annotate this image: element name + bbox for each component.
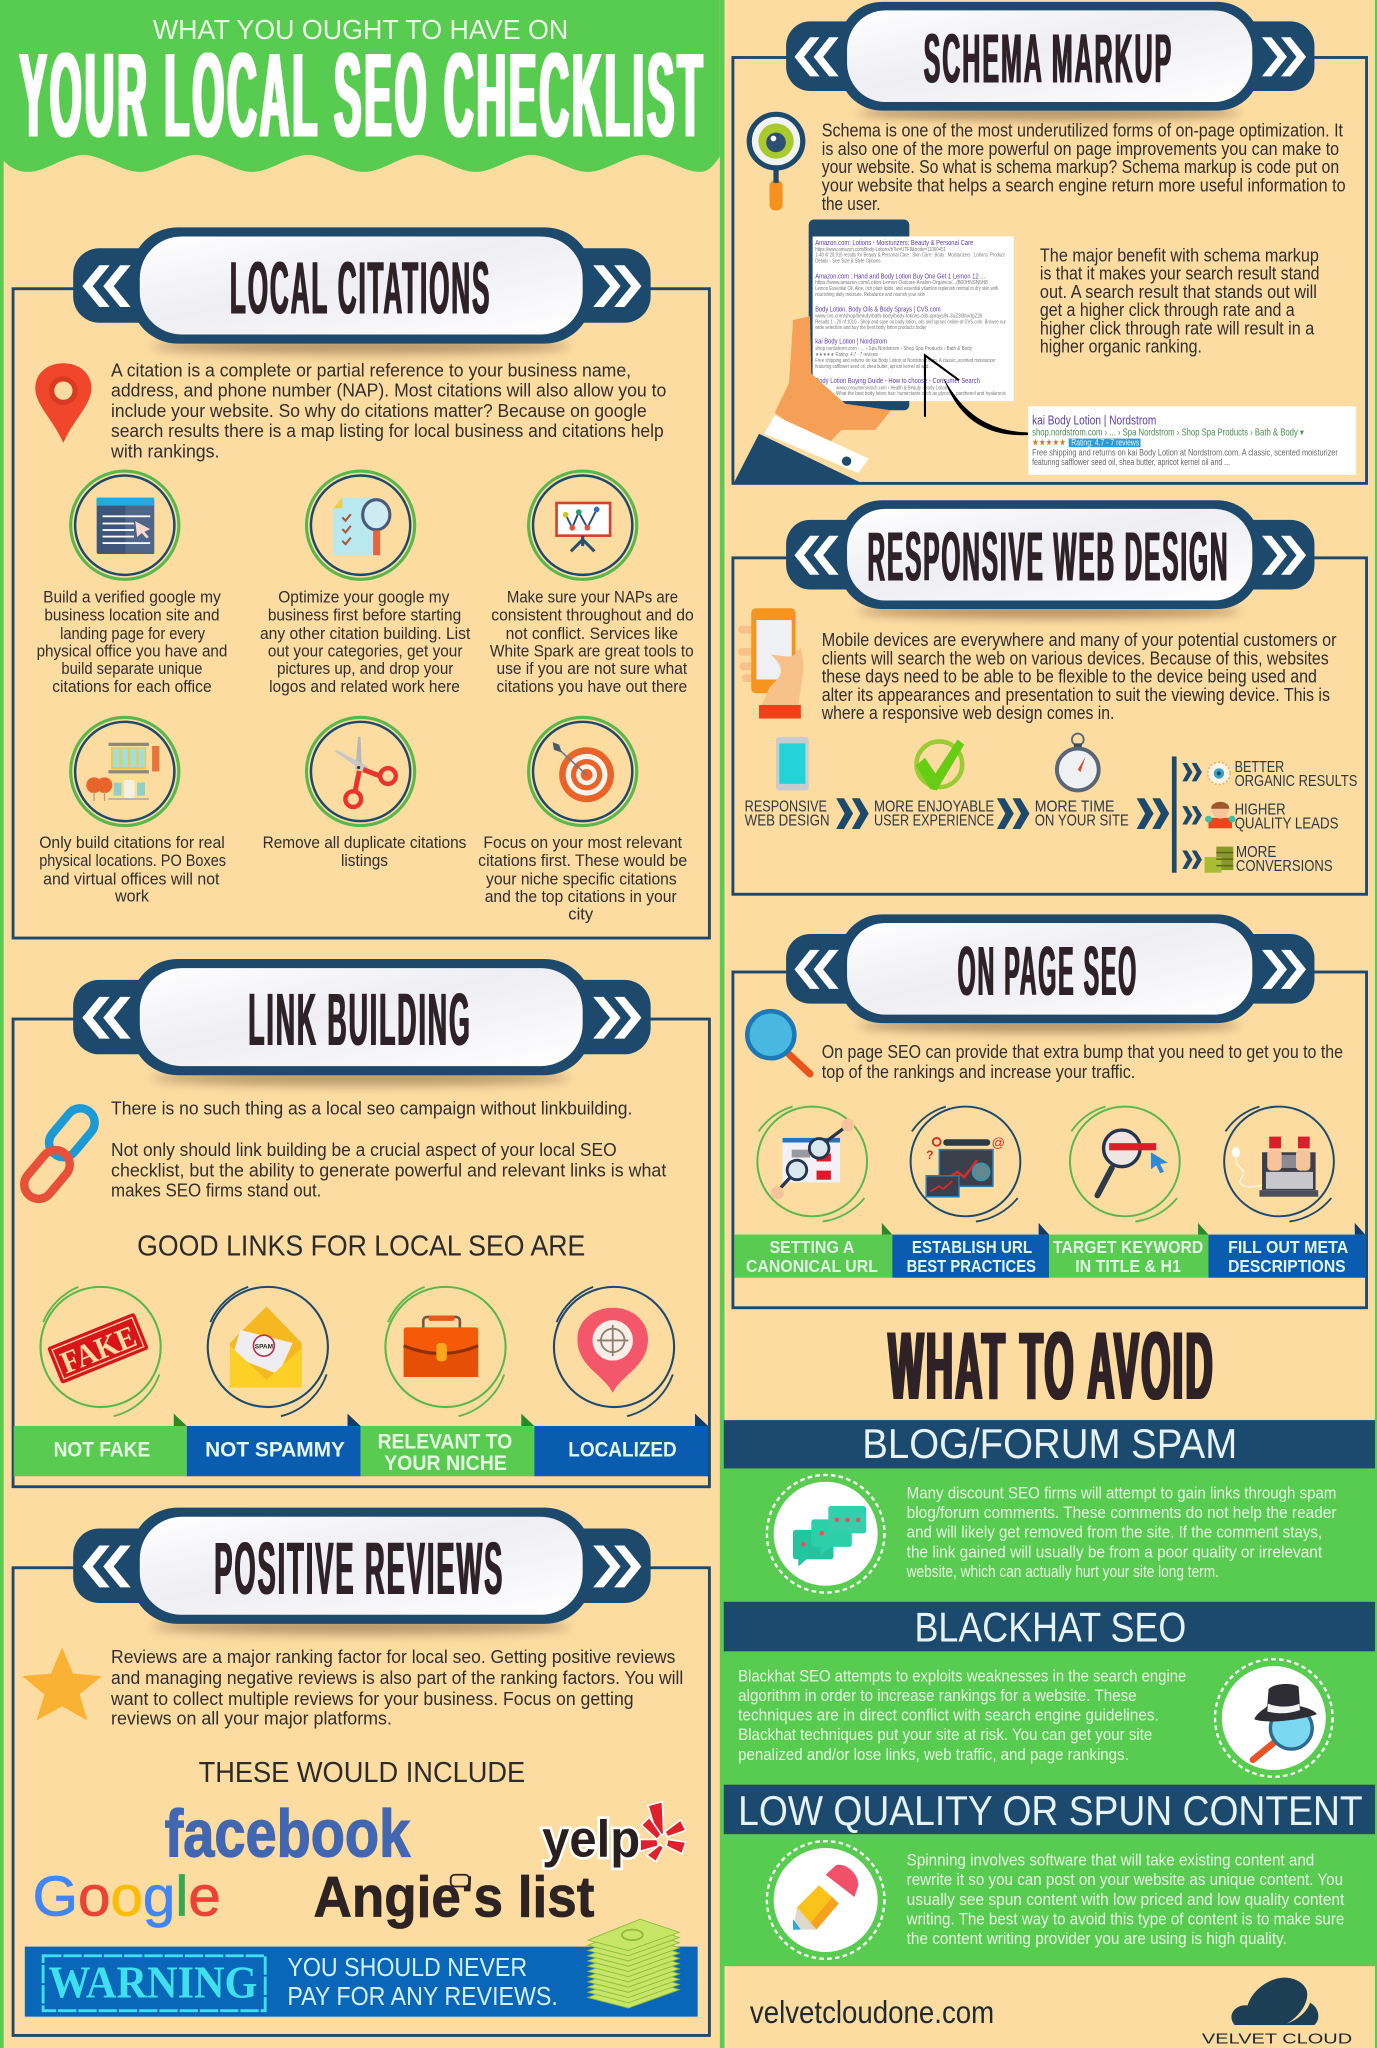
caption: optimize: logos and related work here xyxy=(269,678,460,696)
intro text xyxy=(110,359,666,461)
heading: positive reviews xyxy=(73,1508,651,1634)
icon: pencil eraser xyxy=(767,1841,884,1959)
search results screenshot xyxy=(813,236,1014,401)
panel: responsive web design xyxy=(733,500,1367,894)
panel: link building xyxy=(13,959,709,1487)
caption: consistent naps: White Spark are great tools to xyxy=(490,642,694,660)
caption: consistent naps: use if you are not sure what xyxy=(496,660,688,678)
ribbon: establish url best practices: ESTABLISH URL xyxy=(912,1237,1032,1257)
search results screenshot: Details - See Size & Style Options xyxy=(815,259,881,265)
icon: typewriter laptop xyxy=(1224,1107,1334,1222)
intro text: reviews on all your major platforms. xyxy=(111,1708,392,1729)
ribbon: establish url best practices: BEST PRACTICES xyxy=(907,1256,1036,1276)
body text xyxy=(906,1485,1337,1581)
body text: Blackhat SEO attempts to exploits weaknesses in the search engine xyxy=(738,1667,1186,1685)
caption: duplicates xyxy=(263,834,466,870)
body text: and will likely get removed from the site. If the comment stays, xyxy=(907,1524,1322,1542)
section: blog forum spam xyxy=(724,1420,1375,1602)
search results screenshot: 1-48 of 20,915 results for Beauty & Personal Care : Skin Care : Body : Moisturizers : Lotions. Product xyxy=(815,253,1005,259)
subheading: good links: GOOD LINKS FOR LOCAL SEO ARE xyxy=(137,1231,585,1263)
benefit text: get a higher click through rate and a xyxy=(1040,299,1295,320)
caption: consistent naps: not conflict. Services like xyxy=(506,625,678,643)
benefit text xyxy=(1040,244,1320,357)
logo: facebook: facebook xyxy=(165,1797,411,1871)
icon: spam envelope xyxy=(208,1287,328,1416)
flow step: more enjoyable user experience: MORE ENJOYABLE xyxy=(874,798,994,815)
heading: positive reviews: POSITIVE REVIEWS xyxy=(214,1527,504,1610)
flow step: responsive web design xyxy=(745,737,830,830)
benefit text: out. A search result that stands out will xyxy=(1040,281,1317,302)
icon: url best practices: @ xyxy=(992,1135,1005,1150)
panel: on page seo xyxy=(733,914,1367,1308)
caption: duplicates: Remove all duplicate citations xyxy=(263,834,466,852)
caption: consistent naps: Make sure your NAPs are xyxy=(507,588,678,606)
callout: search result: kai Body Lotion | Nordstrom xyxy=(1032,413,1156,428)
footer xyxy=(750,1978,1352,2047)
callout: search result: Rating: 4.7 - 7 reviews xyxy=(1071,438,1140,448)
ribbon: target keyword in title and h1: TARGET KEYWORD xyxy=(1053,1237,1203,1257)
search results screenshot: Amazon.com : Hand and Body Lotion Buy One Get 1 Lemon 12 ... xyxy=(815,271,985,280)
flow step: more time on your site: MORE TIME xyxy=(1035,798,1114,815)
panel: local citations xyxy=(13,227,709,938)
ribbon: relevant to your niche xyxy=(361,1414,534,1476)
icon: money stack xyxy=(588,1919,679,2008)
icon: presentation board xyxy=(529,471,637,579)
result: more conversions: CONVERSIONS xyxy=(1236,858,1333,875)
caption: relevant citations: and the top citations in your xyxy=(485,888,677,906)
caption: optimize: business first before starting xyxy=(268,607,461,625)
icon: magnifier xyxy=(747,1011,810,1074)
search results screenshot: featuring safflower seed oil, shea butter, apricot kernel oil and ... xyxy=(815,364,933,370)
search results screenshot: kai Body Lotion | Nordstrom xyxy=(815,337,887,346)
icon: black hat and magnifier xyxy=(1215,1659,1333,1777)
panel: schema markup xyxy=(733,2,1367,483)
body text: Many discount SEO firms will attempt to gain links through spam xyxy=(907,1485,1337,1503)
icon: hand holding phone xyxy=(738,608,803,719)
benefit text: The major benefit with schema markup xyxy=(1040,244,1319,265)
body text xyxy=(906,1852,1345,1948)
caption: duplicates: listings xyxy=(341,852,388,870)
caption: relevant citations: citations first. These would be xyxy=(478,852,687,870)
icon: browser xyxy=(71,471,179,579)
caption: relevant citations xyxy=(478,834,687,924)
panel: positive reviews xyxy=(13,1508,709,2035)
flow step: responsive web design: RESPONSIVE xyxy=(745,798,827,815)
heading: responsive web design xyxy=(786,500,1314,619)
ribbon: fill out meta descriptions: DESCRIPTIONS xyxy=(1228,1256,1346,1276)
icon: shop xyxy=(71,717,179,826)
intro text: checklist, but the ability to generate powerful and relevant links is what xyxy=(111,1159,666,1180)
ribbon: localized xyxy=(534,1414,708,1476)
caption: build google site: citations for each office xyxy=(52,678,212,696)
logo: velvet cloud xyxy=(1202,1978,1352,2047)
flow step: more time on your site: ON YOUR SITE xyxy=(1035,813,1129,830)
arrow xyxy=(1137,798,1169,829)
callout: search result: shop.nordstrom.com › ... › Spa Nordstrom › Shop Spa Products › Bath & Body ▾ xyxy=(1032,428,1304,439)
search results screenshot: Body Lotion Buying Guide - How to choose - Consumer Search xyxy=(815,376,980,385)
search results screenshot: Lemon Essential Oil, Aloe, rich plant lipids, and essential vitamins replenish normal to dry skin with xyxy=(815,286,998,292)
benefit text: is that it makes your search result stand xyxy=(1040,263,1320,284)
warning message: PAY FOR ANY REVIEWS. xyxy=(287,1981,558,2011)
ribbon: not fake: NOT FAKE xyxy=(54,1437,150,1462)
divider bar xyxy=(1172,756,1177,873)
search results screenshot: www.cvs.com/shop/beauty/bath-body/body-lotions-oils-sprays/N-3uZ3l3bxdgZ2k xyxy=(815,313,983,319)
icon: chat bubbles xyxy=(767,1475,884,1593)
search results screenshot: Free shipping and returns on kai Body Lotion at Nordstrom.com. A classic, scented moisturizer xyxy=(815,358,996,364)
icon: star xyxy=(22,1647,102,1721)
ribbon: target keyword in title and h1 xyxy=(1049,1223,1208,1278)
icon: magnifier with eye xyxy=(749,114,803,210)
flow step: more enjoyable user experience xyxy=(874,739,994,830)
body text: rewrite it so you can post on your website as unique content. You xyxy=(907,1871,1343,1889)
section: blackhat seo xyxy=(724,1602,1375,1785)
caption: optimize: any other citation building. List xyxy=(260,625,471,643)
caption: consistent naps: citations you have out there xyxy=(496,678,687,696)
callout: search result: ★★★★★ xyxy=(1032,438,1066,449)
caption: relevant citations: your niche specific citations xyxy=(486,870,677,888)
ribbon: relevant to your niche: YOUR NICHE xyxy=(384,1450,507,1475)
warning bar xyxy=(25,1919,698,2017)
intro text: search results there is a map listing for local business and citations help xyxy=(111,420,664,441)
result: better organic results: ORGANIC RESULTS xyxy=(1235,773,1357,790)
ribbon: setting a canonical url: SETTING A xyxy=(769,1237,855,1257)
intro text: and managing negative reviews is also part of the ranking factors. You will xyxy=(111,1667,683,1688)
subheading: these would include: THESE WOULD INCLUDE xyxy=(199,1757,525,1789)
intro text: where a responsive web design comes in. xyxy=(821,702,1114,723)
section title bar xyxy=(724,1420,1375,1468)
intro text: with rankings. xyxy=(110,440,219,461)
intro text xyxy=(821,629,1336,723)
icon: target xyxy=(529,717,637,826)
heading: local citations xyxy=(73,227,651,354)
logo: velvet cloud: VELVET CLOUD xyxy=(1202,2030,1352,2047)
body text: blog/forum comments. These comments do not help the reader xyxy=(907,1504,1337,1522)
body text: writing. The best way to avoid this type of content is to make sure xyxy=(906,1910,1344,1928)
illustration: hand holding phone with search results xyxy=(734,219,1028,482)
result: more conversions: MORE xyxy=(1236,844,1276,861)
body text xyxy=(738,1667,1186,1764)
caption: real locations: Only build citations for real xyxy=(39,834,225,852)
search results screenshot: www.consumersearch.com › Health & Beauty › Body Lotion xyxy=(836,385,947,391)
footer url: velvetcloudone.com xyxy=(750,1995,994,2030)
intro text xyxy=(111,1097,666,1201)
callout: search result xyxy=(1028,406,1356,475)
search results screenshot: Amazon.com: Lotions - Moisturizers: Beauty & Personal Care xyxy=(815,238,973,247)
benefit text: higher organic ranking. xyxy=(1040,336,1202,357)
icon: scissors xyxy=(306,717,415,826)
intro text: There is no such thing as a local seo campaign without linkbuilding. xyxy=(111,1097,632,1118)
intro text: Reviews are a major ranking factor for local seo. Getting positive reviews xyxy=(111,1646,675,1667)
ribbon: setting a canonical url: CANONICAL URL xyxy=(746,1256,878,1276)
heading: local citations: LOCAL CITATIONS xyxy=(230,247,491,330)
intro text: Not only should link building be a crucial aspect of your local SEO xyxy=(111,1139,617,1160)
caption: build google site: Build a verified google my xyxy=(43,588,222,606)
intro text: want to collect multiple reviews for your business. Focus on getting xyxy=(110,1688,634,1709)
search results screenshot: wide selection and buy the best body lotion products today xyxy=(815,325,927,331)
header banner xyxy=(0,0,720,172)
heading: link building: LINK BUILDING xyxy=(248,978,472,1061)
caption: real locations xyxy=(39,834,226,905)
intro text: makes SEO firms stand out. xyxy=(111,1180,321,1201)
icon: chain link xyxy=(18,1102,100,1205)
logo: google: Google xyxy=(33,1864,221,1927)
ribbon: target keyword in title and h1: IN TITLE & H1 xyxy=(1075,1256,1181,1276)
body text: usually see spun content with low priced and low quality content xyxy=(907,1891,1345,1909)
icon: briefcase xyxy=(385,1287,506,1416)
icon: target keyword xyxy=(1070,1107,1180,1222)
caption: real locations: work xyxy=(114,887,150,905)
section title bar xyxy=(724,1602,1375,1651)
result: better organic results: BETTER xyxy=(1235,759,1284,776)
arrow xyxy=(836,798,869,829)
search results screenshot: ★★★★★ Rating: 4.7 - 7 reviews xyxy=(815,352,878,358)
body text: techniques are in direct conflict with search engine guidelines. xyxy=(738,1707,1159,1725)
body text: website, which can actually hurt your site long term. xyxy=(906,1563,1219,1581)
callout: search result: featuring safflower seed oil, shea butter, apricot kernel oil and ... xyxy=(1032,457,1230,467)
flow step: responsive web design: WEB DESIGN xyxy=(745,813,830,830)
flow step: more time on your site xyxy=(1035,734,1129,830)
logo: angies list: Angie's list xyxy=(314,1866,594,1930)
icon: fake stamp xyxy=(40,1287,161,1416)
body text: the link gained will usually be from a poor quality or irrelevant xyxy=(907,1543,1323,1561)
flow step: more enjoyable user experience: USER EXPERIENCE xyxy=(874,813,994,830)
icon: spam envelope: SPAM xyxy=(255,1343,273,1350)
intro text: these days need to be able to be flexible to the device being used and xyxy=(822,666,1317,687)
section title bar: BLACKHAT SEO xyxy=(915,1604,1186,1651)
icon: fake stamp: FAKE xyxy=(56,1319,141,1380)
caption: real locations: physical locations. PO Boxes xyxy=(39,852,226,870)
search results screenshot: nourishing daily moisture. Rebalance and nourish your skin xyxy=(815,292,925,298)
ribbon: relevant to your niche: RELEVANT TO xyxy=(378,1428,512,1453)
caption: relevant citations: Focus on your most relevant xyxy=(483,834,682,852)
section: low quality or spun content xyxy=(724,1785,1375,1966)
benefit text: higher click through rate will result in a xyxy=(1040,317,1315,338)
heading: link building xyxy=(73,959,651,1086)
search results screenshot: https://www.amazon.com/Lotion-Lemon-Oatcare-Avalon-Organics/.../B00HNSN5H8 xyxy=(815,280,988,286)
intro text: top of the rankings and increase your traffic. xyxy=(822,1061,1135,1082)
intro text xyxy=(822,1041,1343,1082)
caption: build google site xyxy=(37,588,227,696)
icon: location target pin xyxy=(554,1287,674,1416)
ribbon: not spammy xyxy=(187,1414,361,1476)
result: higher quality leads: HIGHER xyxy=(1235,802,1286,819)
logo: yelp: yelp xyxy=(542,1810,640,1868)
caption: build google site: physical office you have and xyxy=(37,642,227,660)
body text: the content writing provider you are using is high quality. xyxy=(907,1930,1287,1948)
intro text: the user. xyxy=(822,193,881,214)
result: more conversions xyxy=(1205,844,1333,875)
intro text xyxy=(822,120,1346,214)
icon: url best practices xyxy=(911,1107,1020,1222)
body text: Spinning involves software that will take existing content and xyxy=(907,1852,1314,1870)
ribbon: not spammy: NOT SPAMMY xyxy=(205,1437,345,1462)
logo: yelp xyxy=(542,1802,686,1868)
arrow xyxy=(1182,851,1202,869)
result: better organic results xyxy=(1208,759,1357,790)
ribbon: establish url best practices xyxy=(892,1223,1049,1278)
heading: on page seo xyxy=(786,914,1314,1033)
body text: penalized and/or lose links, web traffic, and page rankings. xyxy=(738,1746,1129,1764)
icon: url best practices: ? xyxy=(926,1149,933,1162)
section title bar: BLOG/FORUM SPAM xyxy=(862,1420,1237,1467)
ribbon: setting a canonical url xyxy=(734,1223,892,1278)
warning message: YOU SHOULD NEVER xyxy=(287,1952,527,1982)
search results screenshot: https://www.amazon.com/Body-Lotions/b?ie=UTF8&node=11060451 xyxy=(815,247,946,253)
icon: map pin xyxy=(35,363,91,443)
caption: optimize xyxy=(260,588,471,696)
caption: optimize: pictures up, and drop your xyxy=(277,660,454,678)
caption: build google site: landing page for every xyxy=(60,625,206,643)
result: higher quality leads xyxy=(1205,802,1338,832)
search results screenshot: Results 1 - 20 of 1010 - Shop and save on body lotion, oils and sprays online at CVS.com. Browse our xyxy=(815,319,1006,325)
intro text xyxy=(110,1646,683,1729)
intro text: A citation is a complete or partial reference to your business name, xyxy=(111,359,631,380)
arrow xyxy=(1182,806,1202,825)
caption: build google site: business location site and xyxy=(44,607,219,625)
search results screenshot: What the best body lotion has: humectants such as glycerin, panthenol and hyaluronic xyxy=(836,391,1006,397)
caption: build google site: build separate unique xyxy=(61,660,202,678)
arrow xyxy=(1182,763,1202,781)
icon: document with magnifier xyxy=(306,471,415,579)
ribbon: not fake xyxy=(14,1414,187,1476)
icon: canonical url xyxy=(757,1107,867,1222)
ribbon: localized: LOCALIZED xyxy=(568,1437,677,1462)
warning message xyxy=(287,1952,558,2011)
ribbon: fill out meta descriptions xyxy=(1208,1223,1365,1278)
body text: Blackhat techniques put your site at risk. You can get your site xyxy=(738,1726,1152,1744)
caption: consistent naps: consistent throughout and do xyxy=(491,607,694,625)
caption: optimize: Optimize your google my xyxy=(278,588,450,606)
search results screenshot: Body Lotion, Body Oils & Body Sprays | CVS.com xyxy=(815,305,941,314)
result: higher quality leads: QUALITY LEADS xyxy=(1235,815,1338,832)
heading: schema markup xyxy=(786,2,1314,120)
body text: algorithm in order to increase rankings for a website. These xyxy=(738,1687,1137,1705)
header subtitle: WHAT YOU OUGHT TO HAVE ON xyxy=(153,14,568,45)
caption: real locations: and virtual offices will not xyxy=(43,870,220,888)
caption: optimize: out your categories, get your xyxy=(268,642,463,660)
warning stamp: WARNING xyxy=(48,1957,257,2008)
intro text: address, and phone number (NAP). Most citations will also allow you to xyxy=(111,380,666,401)
caption: relevant citations: city xyxy=(568,906,594,924)
search results screenshot: shop.nordstrom.com › ... › Spa Nordstrom › Shop Spa Products › Bath & Body xyxy=(815,346,972,352)
caption: consistent naps xyxy=(490,588,694,696)
ribbon: fill out meta descriptions: FILL OUT META xyxy=(1228,1237,1349,1257)
arrow xyxy=(997,798,1029,829)
intro text: include your website. So why do citations matter? Because on google xyxy=(111,400,647,421)
